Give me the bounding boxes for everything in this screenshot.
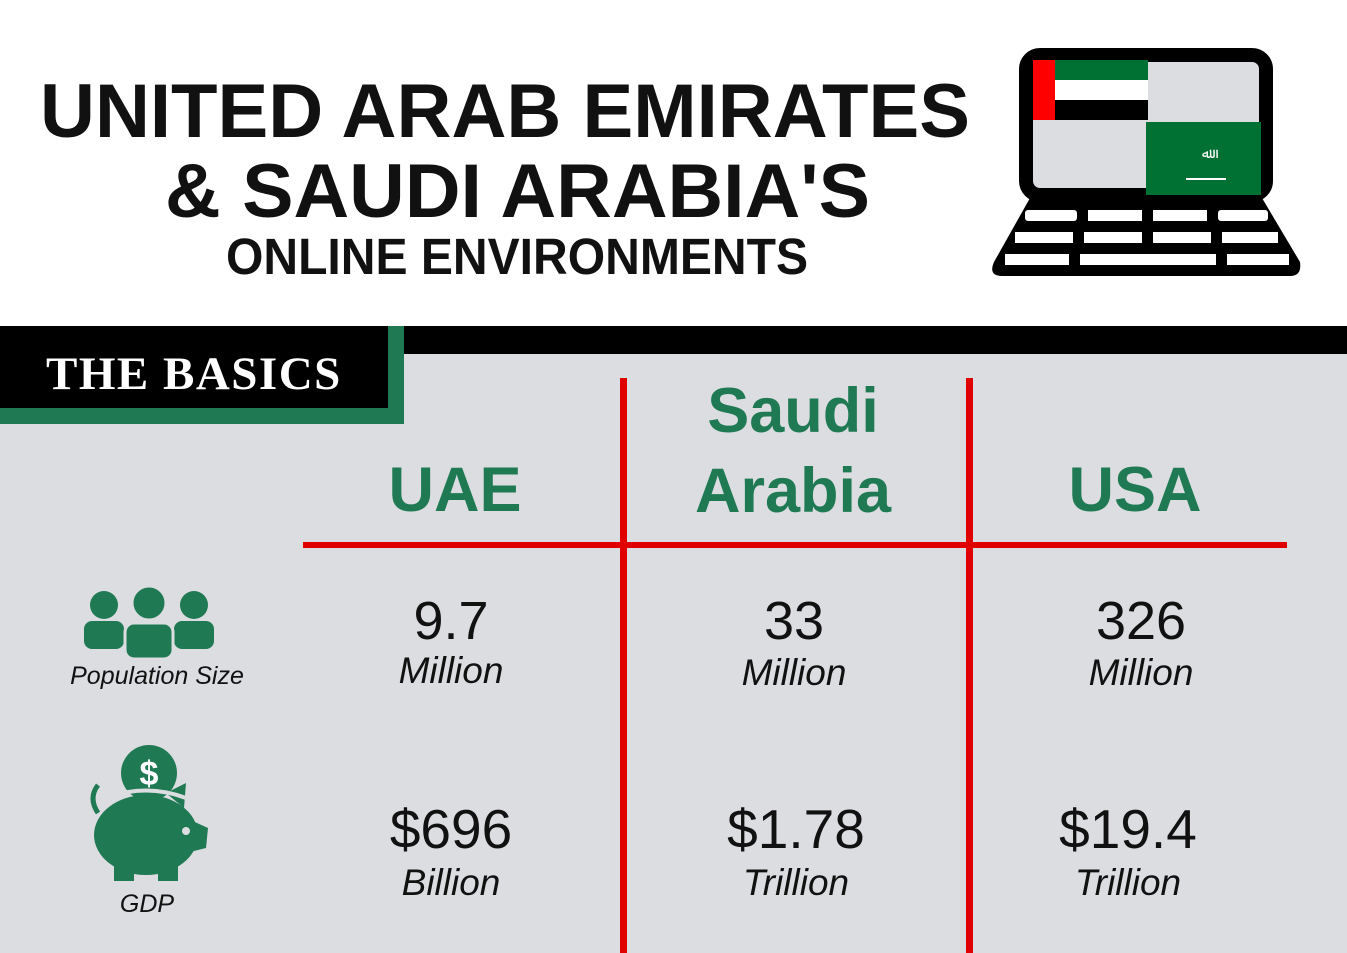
data values	[390, 591, 1197, 903]
label: gdp: GDP	[120, 890, 174, 918]
column headers: Arabia	[695, 456, 891, 526]
data values: $19.4	[1059, 798, 1197, 860]
data values: Million	[742, 652, 846, 693]
data values: $1.78	[727, 798, 865, 860]
column headers: UAE	[388, 455, 522, 525]
column headers: USA	[1068, 455, 1202, 525]
data values: Million	[1089, 652, 1193, 693]
column headers	[388, 376, 1202, 526]
icon: piggy bank	[90, 745, 208, 881]
data values: Trillion	[743, 862, 849, 903]
icon: laptop with flags: ﷲ	[1202, 146, 1218, 162]
data values: $696	[390, 798, 512, 860]
data values: Million	[399, 650, 503, 691]
icon: piggy bank: $	[140, 755, 159, 793]
column headers: Saudi	[707, 376, 879, 446]
panel: the basics	[0, 326, 1347, 953]
heading: the basics: THE BASICS	[46, 348, 342, 400]
data values: 326	[1096, 591, 1186, 651]
title: ONLINE ENVIRONMENTS	[226, 228, 808, 285]
data values: 9.7	[413, 591, 489, 651]
title	[40, 69, 970, 285]
data values: Trillion	[1075, 862, 1181, 903]
label: population size: Population Size	[70, 662, 244, 690]
data values: 33	[764, 591, 824, 651]
title: & SAUDI ARABIA'S	[165, 149, 870, 234]
data values: Billion	[402, 862, 500, 903]
title: UNITED ARAB EMIRATES	[40, 69, 970, 154]
heading: the basics	[0, 326, 404, 424]
icon: laptop with flags	[992, 48, 1300, 276]
icon: population	[84, 588, 214, 658]
